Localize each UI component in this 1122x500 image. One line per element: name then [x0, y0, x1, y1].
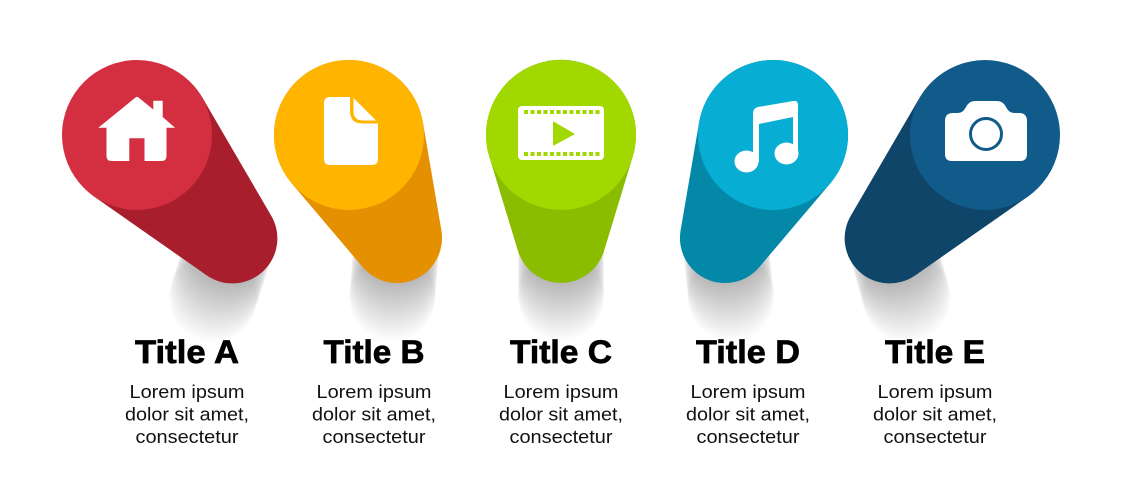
icon: house: [98, 97, 175, 161]
text D: consectetur: [696, 426, 800, 447]
panel: item A: [62, 60, 277, 447]
text E: [873, 381, 997, 447]
circle E: [910, 60, 1060, 210]
capsule A: [63, 61, 277, 283]
icon: document: [324, 97, 378, 165]
text E: dolor sit amet,: [873, 404, 997, 424]
text B: Lorem ipsum: [316, 381, 432, 402]
title A: Title A: [135, 334, 239, 370]
text C: consectetur: [510, 426, 612, 447]
icon: film: [518, 106, 604, 160]
text B: dolor sit amet,: [312, 404, 436, 424]
capsule B: [274, 60, 442, 283]
text E: consectetur: [884, 426, 986, 447]
text D: dolor sit amet,: [686, 404, 810, 424]
text D: Lorem ipsum: [690, 381, 806, 402]
circle D: [698, 60, 848, 210]
shadow B: [349, 198, 440, 341]
title B: Title B: [324, 334, 424, 370]
text A: consectetur: [136, 426, 238, 447]
text C: [499, 381, 623, 447]
panel: item D: [680, 60, 848, 447]
icon: music notes: [734, 101, 798, 172]
shadow A: [169, 196, 275, 342]
panel: item E: [845, 60, 1060, 447]
circle A: [62, 60, 212, 210]
text E: Lorem ipsum: [878, 381, 992, 402]
capsule E: [845, 61, 1059, 283]
panel: item C: [486, 60, 636, 447]
shadow D: [682, 198, 774, 341]
shadow C: [518, 198, 604, 341]
text B: consectetur: [322, 426, 426, 447]
icon: camera: [945, 101, 1027, 161]
title C: Title C: [510, 334, 612, 370]
capsule C: [486, 60, 636, 283]
text C: dolor sit amet,: [499, 404, 623, 424]
text D: [686, 381, 810, 447]
title D: Title D: [696, 334, 800, 370]
panel: item B: [274, 60, 442, 447]
text C: Lorem ipsum: [504, 381, 618, 402]
circle C: [486, 60, 636, 210]
title E: Title E: [885, 334, 985, 370]
text A: dolor sit amet,: [125, 404, 249, 424]
text A: [125, 381, 249, 447]
capsule D: [680, 60, 848, 283]
shadow E: [847, 196, 951, 342]
text B: [312, 381, 436, 447]
text A: Lorem ipsum: [130, 381, 244, 402]
circle B: [274, 60, 424, 210]
